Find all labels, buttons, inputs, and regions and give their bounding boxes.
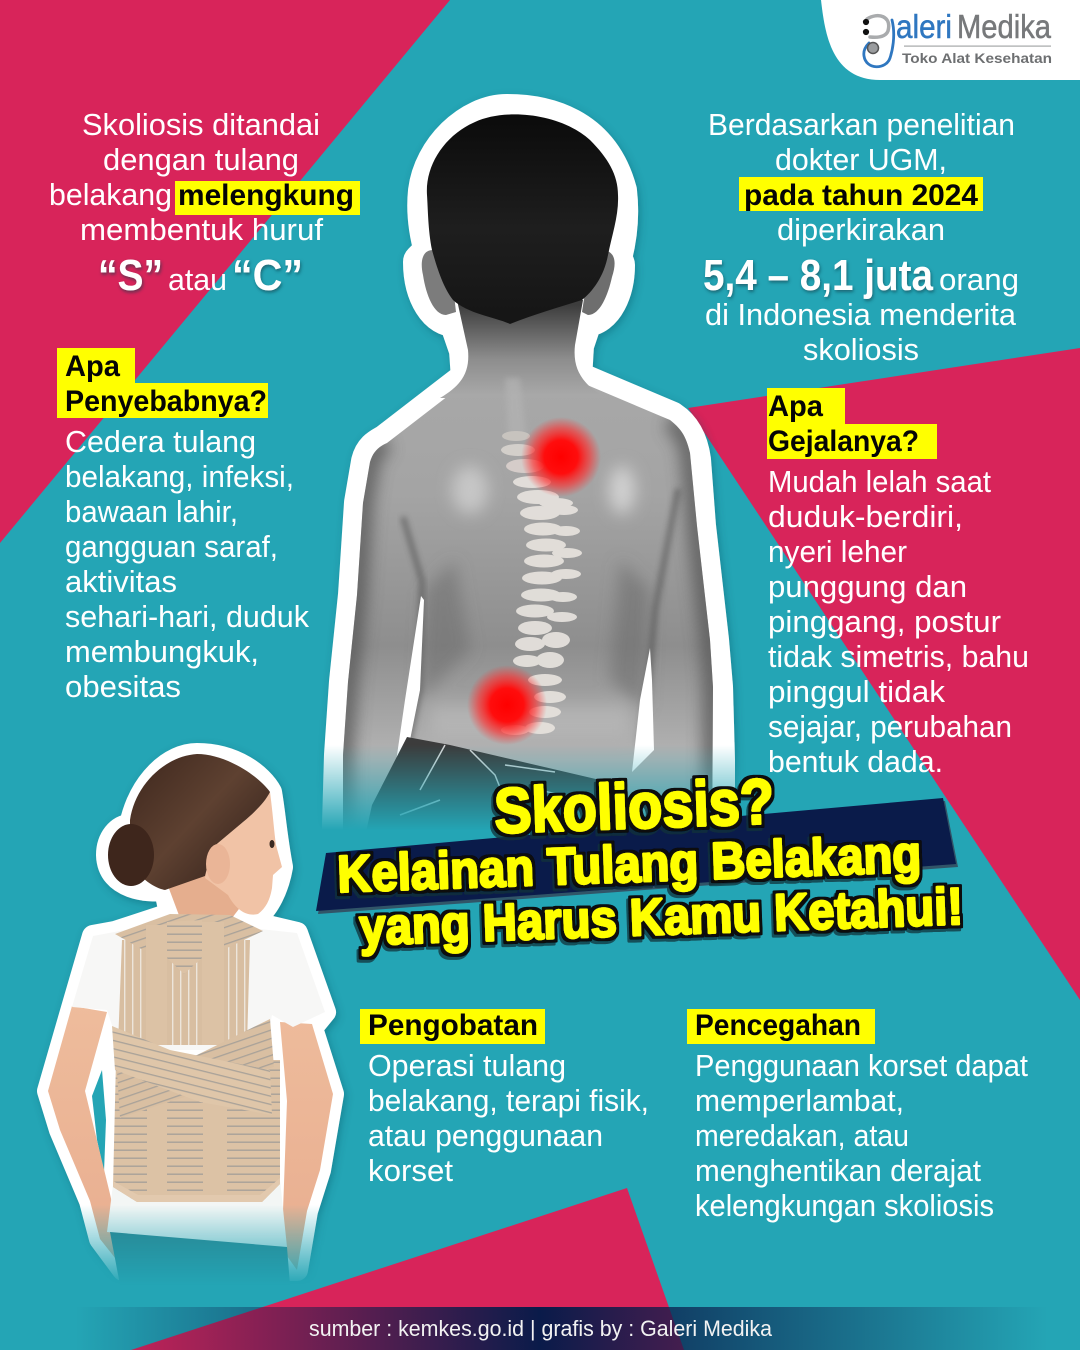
panel: prevention xyxy=(687,1009,1028,1223)
causes text: aktivitas xyxy=(65,564,177,599)
body edge shading and creases xyxy=(343,420,713,860)
text block: definition xyxy=(49,107,360,300)
prevention text: kelengkungan skoliosis xyxy=(695,1188,994,1223)
text block: definition: dengan tulang xyxy=(103,142,299,177)
brace crossing band right xyxy=(117,1019,274,1118)
pink shape: right xyxy=(688,348,1080,1000)
heading: causes xyxy=(57,348,268,418)
pain glow: lower spine xyxy=(467,665,547,745)
back brace xyxy=(112,914,280,1202)
left ear xyxy=(422,250,456,315)
text block: definition: “C” xyxy=(232,251,303,300)
brace right strap xyxy=(202,922,224,1045)
face xyxy=(205,792,282,915)
arm gap right xyxy=(632,648,654,772)
causes text xyxy=(65,424,309,704)
prevention text xyxy=(695,1048,1028,1223)
photo: boy's back with curved spine xyxy=(340,113,716,860)
symptoms text xyxy=(768,464,1029,779)
treatment text xyxy=(368,1048,649,1188)
symptoms text: sejajar, perubahan xyxy=(768,709,1012,744)
pink shape: top left xyxy=(0,0,450,543)
text block: definition: melengkung xyxy=(178,179,354,212)
title text: Kelainan Tulang Belakang xyxy=(336,826,922,904)
symptoms text: duduk-berdiri, xyxy=(768,499,963,534)
boy white outline xyxy=(340,113,716,860)
photo: girl wearing back brace xyxy=(48,754,333,1285)
stethoscope icon xyxy=(863,16,894,67)
brace lower straps xyxy=(147,1102,227,1191)
logo tagline: Toko Alat Kesehatan xyxy=(902,50,1052,66)
hair xyxy=(427,114,618,324)
text block: definition: belakang xyxy=(49,177,172,212)
treatment text: korset xyxy=(368,1153,453,1188)
heading: prevention: Pencegahan xyxy=(695,1009,861,1042)
text block: prevalence xyxy=(703,107,1019,367)
text block: prevalence: pada tahun 2024 xyxy=(744,179,978,212)
spine vertebrae xyxy=(501,378,582,735)
text block: prevalence: orang xyxy=(939,262,1019,297)
heading: symptoms: Apa xyxy=(768,390,823,423)
text block: prevalence: 5,4 – 8,1 juta xyxy=(703,251,933,300)
logo wordmark second part: Medika xyxy=(957,8,1052,45)
causes text: obesitas xyxy=(65,669,181,704)
brace hem xyxy=(113,1178,280,1202)
causes text: membungkuk, xyxy=(65,634,259,669)
text block: prevalence: diperkirakan xyxy=(777,212,945,247)
symptoms text: tidak simetris, bahu xyxy=(768,639,1029,674)
symptoms text: nyeri leher xyxy=(768,534,907,569)
causes text: Cedera tulang xyxy=(65,424,256,459)
brace chevron xyxy=(167,920,202,974)
brace crossing band left xyxy=(112,1026,272,1115)
title banner xyxy=(316,765,964,957)
pain glow: upper spine xyxy=(521,417,601,497)
text block: definition: membentuk huruf xyxy=(80,212,323,247)
hair bun xyxy=(108,824,154,886)
teal gap between left arm and torso xyxy=(92,1070,106,1172)
neck xyxy=(168,872,242,918)
right arm xyxy=(280,1022,333,1270)
text block: prevalence: Berdasarkan penelitian xyxy=(708,107,1015,142)
dark shorts xyxy=(110,1232,290,1285)
panel: treatment xyxy=(360,1009,649,1188)
prevention text: Penggunaan korset dapat xyxy=(695,1048,1028,1083)
logo panel xyxy=(821,0,1080,80)
text block: prevalence: skoliosis xyxy=(803,332,919,367)
brace upper panel xyxy=(118,940,250,1045)
causes text: belakang, infeksi, xyxy=(65,459,294,494)
t-shirt xyxy=(72,928,325,1050)
treatment text: atau penggunaan xyxy=(368,1118,603,1153)
brace lower body xyxy=(113,1060,280,1202)
girl white outline xyxy=(48,754,333,1270)
treatment text: belakang, terapi fisik, xyxy=(368,1083,649,1118)
symptoms text: pinggul tidak xyxy=(768,674,946,709)
symptoms text: Mudah lelah saat xyxy=(768,464,991,499)
footer band xyxy=(0,1307,1080,1350)
shorts xyxy=(368,737,596,824)
title text xyxy=(336,765,964,957)
heading: symptoms xyxy=(767,388,937,459)
text block: definition: “S” xyxy=(98,251,163,300)
banner shape xyxy=(316,798,956,911)
ear xyxy=(206,844,230,884)
prevention text: memperlambat, xyxy=(695,1083,904,1118)
logo wordmark: aleri xyxy=(896,8,952,45)
heading: causes: Penyebabnya? xyxy=(65,385,267,418)
prevention text: meredakan, atau xyxy=(695,1118,909,1153)
logo white tab xyxy=(821,0,1080,80)
eye xyxy=(270,840,274,848)
heading: symptoms: Gejalanya? xyxy=(768,425,919,458)
panel: symptoms xyxy=(767,388,1029,779)
text block: prevalence: di Indonesia menderita xyxy=(705,297,1017,332)
text block: definition: Skoliosis ditandai xyxy=(82,107,320,142)
logo divider xyxy=(904,46,1051,47)
footer source credit: sumber : kemkes.go.id | grafis by : Galeri Medika xyxy=(309,1316,773,1341)
panel: causes xyxy=(57,348,309,704)
hair xyxy=(130,754,270,890)
arm gap left xyxy=(396,596,424,762)
prevention text: menghentikan derajat xyxy=(695,1153,981,1188)
pink shape: bottom xyxy=(131,1188,684,1350)
brace left strap xyxy=(146,925,167,1045)
heading: causes: Apa xyxy=(65,350,120,383)
right ear xyxy=(582,250,615,315)
causes text: gangguan saraf, xyxy=(65,529,278,564)
causes text: sehari-hari, duduk xyxy=(65,599,309,634)
title text: yang Harus Kamu Ketahui! xyxy=(358,878,964,957)
lower shirt xyxy=(107,1180,287,1247)
heading: treatment: Pengobatan xyxy=(368,1009,538,1042)
text block: definition: atau xyxy=(168,262,227,297)
brace yoke xyxy=(115,914,263,950)
left arm xyxy=(48,1006,115,1258)
symptoms text: bentuk dada. xyxy=(768,744,943,779)
title text: Skoliosis? xyxy=(493,765,775,847)
symptoms text: pinggang, postur xyxy=(768,604,1001,639)
treatment text: Operasi tulang xyxy=(368,1048,566,1083)
text block: prevalence: dokter UGM, xyxy=(775,142,947,177)
neck xyxy=(440,300,605,398)
causes text: bawaan lahir, xyxy=(65,494,238,529)
symptoms text: punggung dan xyxy=(768,569,967,604)
body xyxy=(343,379,713,860)
